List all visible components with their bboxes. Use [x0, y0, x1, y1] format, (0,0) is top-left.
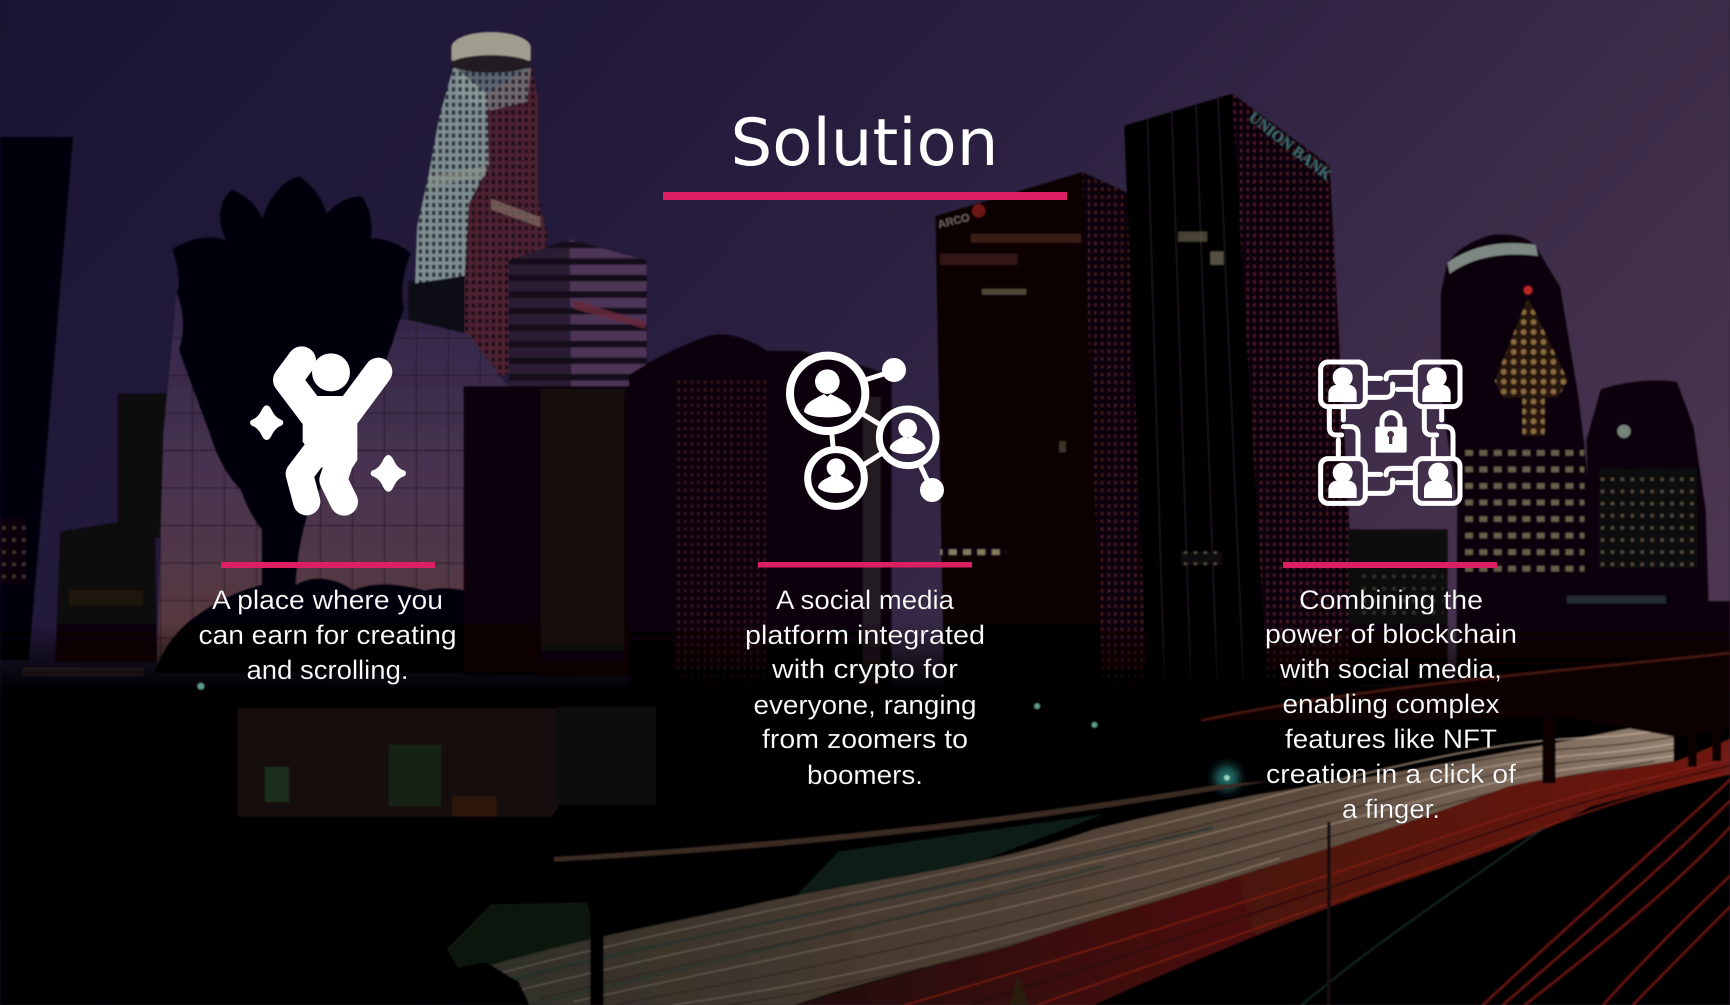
- icon: blockchain of people with padlock: [1321, 362, 1460, 503]
- text: column 1 description: and scrolling.: [246, 655, 408, 685]
- text: column 2 description: with crypto for: [771, 654, 958, 684]
- text: column 3 description: with social media,: [1279, 654, 1502, 684]
- background: night city skyline with highway light trails: ARCO: [937, 212, 972, 231]
- far-left tower and low blocks: [0, 137, 73, 660]
- round twin towers: [629, 334, 891, 706]
- bush bottom: [447, 902, 596, 976]
- low building with green door: [237, 708, 585, 816]
- divider bar: [1283, 562, 1497, 568]
- text: column 3 description: Combining the: [1299, 585, 1483, 615]
- text: column 2 description: boomers.: [807, 760, 923, 790]
- striped mid-rise: [509, 239, 647, 397]
- title: Solution: Solution: [730, 106, 998, 181]
- icon: connected people network: [790, 356, 944, 506]
- column 1: earn: [198, 353, 456, 685]
- text: column 2 description: everyone, ranging: [754, 690, 976, 720]
- ARCO tower: [936, 172, 1158, 706]
- text: column 2 description: A social media: [776, 585, 955, 615]
- text: column 3 description: a finger.: [1342, 794, 1440, 824]
- column 2: social media: [745, 356, 985, 790]
- text: column 1 description: [198, 585, 456, 685]
- divider bar: [758, 562, 972, 568]
- text: column 2 description: [745, 585, 985, 790]
- text: column 3 description: enabling complex: [1282, 689, 1500, 719]
- text: column 3 description: power of blockchain: [1265, 619, 1517, 649]
- ground darkness: [0, 689, 1730, 1005]
- far-right red streaks: [1483, 780, 1730, 1005]
- column 3: blockchain: [1265, 362, 1517, 824]
- dark central blocks: [463, 386, 629, 675]
- text: column 1 description: can earn for creating: [198, 620, 456, 650]
- right towers with lit windows: [1441, 234, 1605, 706]
- upper thin road streak: [554, 781, 1269, 862]
- glass office block: [157, 267, 508, 673]
- palm tree: [155, 177, 502, 673]
- red light trails: [797, 739, 1730, 1005]
- overpass and posts: [1201, 653, 1730, 737]
- title underline: [663, 192, 1067, 200]
- background: night city skyline with highway light trails: UNION BANK: [1245, 109, 1335, 184]
- US Bank tower: [408, 276, 491, 381]
- text: column 2 description: from zoomers to: [762, 724, 968, 754]
- text: column 3 description: features like NFT: [1285, 724, 1497, 754]
- beige light trails: [455, 719, 1674, 1005]
- divider bar: [221, 562, 435, 568]
- text: column 3 description: [1265, 585, 1517, 824]
- text: column 1 description: A place where you: [212, 585, 443, 615]
- text: column 2 description: platform integrated: [745, 620, 985, 650]
- icon: jumping person with sparkles: [250, 353, 406, 502]
- Union Bank tower: [1124, 94, 1269, 706]
- text: column 3 description: creation in a click of: [1266, 759, 1517, 789]
